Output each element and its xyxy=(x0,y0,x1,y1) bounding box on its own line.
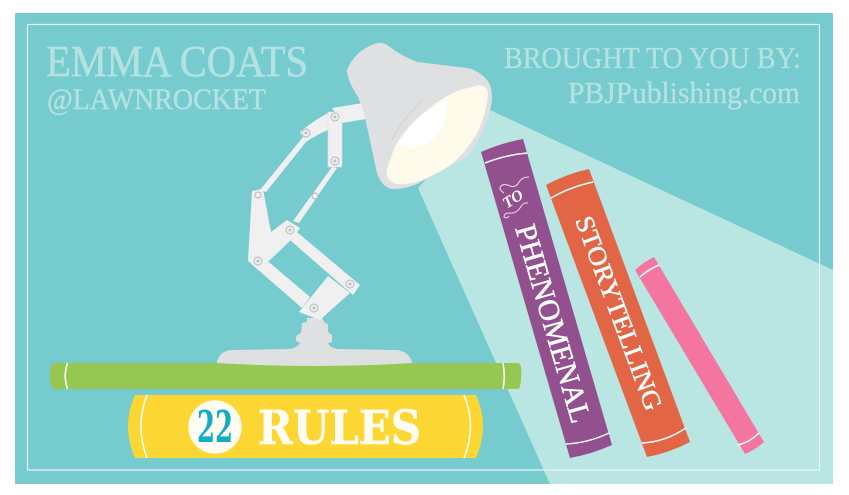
shade highlight xyxy=(392,100,423,140)
shade interior xyxy=(387,85,488,184)
green book xyxy=(50,363,521,389)
author name: EMMA COATS xyxy=(46,37,308,86)
publisher credit heading: BROUGHT TO YOU BY: xyxy=(504,40,801,75)
publisher URL: PBJPublishing.com xyxy=(568,75,800,110)
rules label: RULES xyxy=(258,400,421,455)
yellow book: 22 rules xyxy=(128,395,483,458)
purple book: to phenomenal xyxy=(481,139,612,458)
lamp arms xyxy=(248,103,366,320)
lamp bulb xyxy=(399,100,447,147)
swash word: to xyxy=(500,177,529,218)
desk lamp xyxy=(217,43,492,366)
light beam xyxy=(418,110,833,484)
orange book: storytelling xyxy=(546,169,690,457)
swash word: to: TO xyxy=(500,186,527,212)
lamp base xyxy=(217,318,412,366)
pink book xyxy=(635,257,764,454)
lamp shade xyxy=(347,43,492,189)
arm bolts xyxy=(254,113,354,312)
book title: STORYTELLING xyxy=(569,212,668,414)
book title: PHENOMENAL xyxy=(508,221,597,427)
author handle: @LAWNROCKET xyxy=(47,83,266,116)
number badge xyxy=(188,400,242,454)
number badge: 22 xyxy=(197,402,233,453)
